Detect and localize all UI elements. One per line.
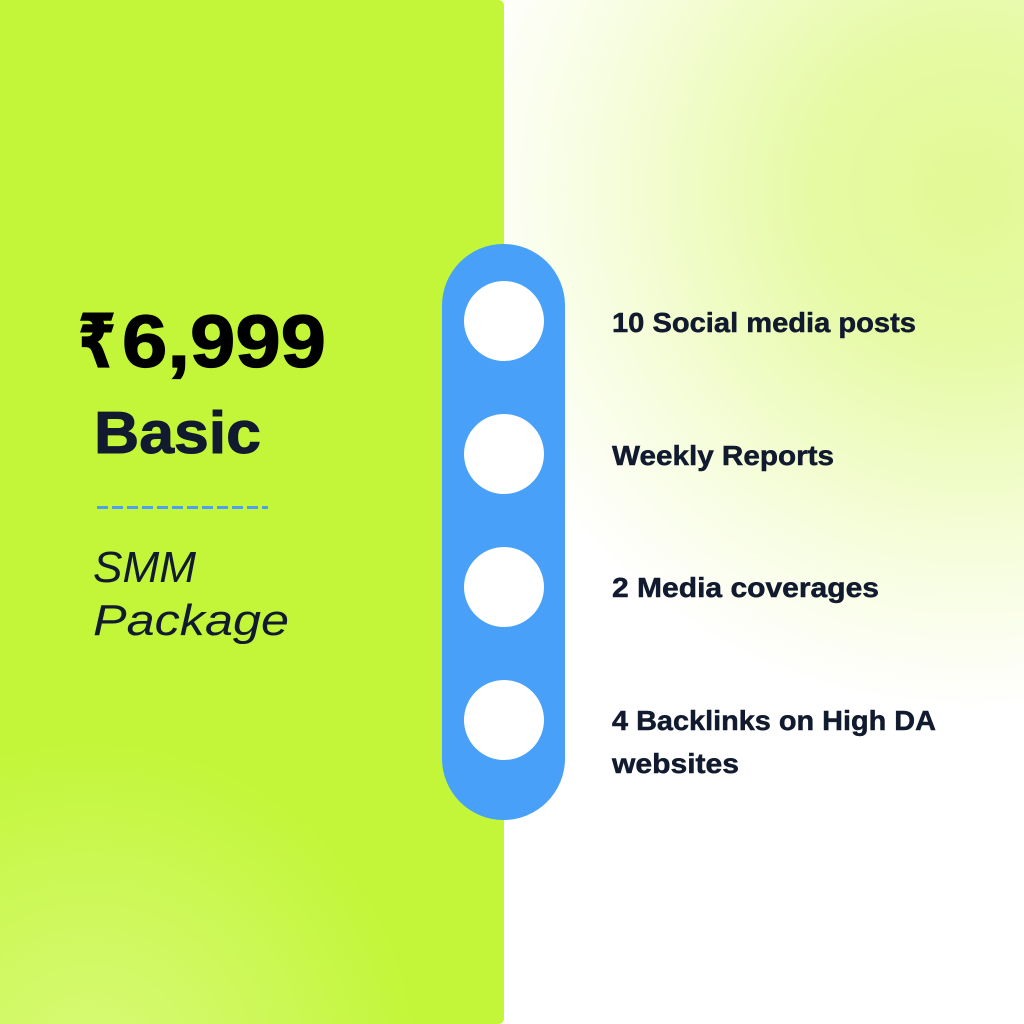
text block: package label xyxy=(93,543,289,645)
feature: social media posts: 10 Social media posts xyxy=(612,307,916,338)
heading: plan name: Basic xyxy=(94,400,261,466)
feature: backlinks: 4 Backlinks on High DA xyxy=(612,705,936,736)
price: 6,999 xyxy=(122,300,326,383)
text block: package label: SMM xyxy=(93,543,196,592)
dashed divider xyxy=(97,506,268,509)
timeline pill with circles xyxy=(442,244,565,820)
feature: media coverages: 2 Media coverages xyxy=(612,572,879,603)
price: ₹ xyxy=(78,300,116,383)
panel: left lime price panel xyxy=(0,0,504,1024)
feature: backlinks xyxy=(611,705,936,779)
text block: package label: Package xyxy=(93,596,289,645)
feature: weekly reports: Weekly Reports xyxy=(612,440,834,471)
feature: backlinks: websites xyxy=(611,748,739,779)
feature list xyxy=(611,307,936,779)
